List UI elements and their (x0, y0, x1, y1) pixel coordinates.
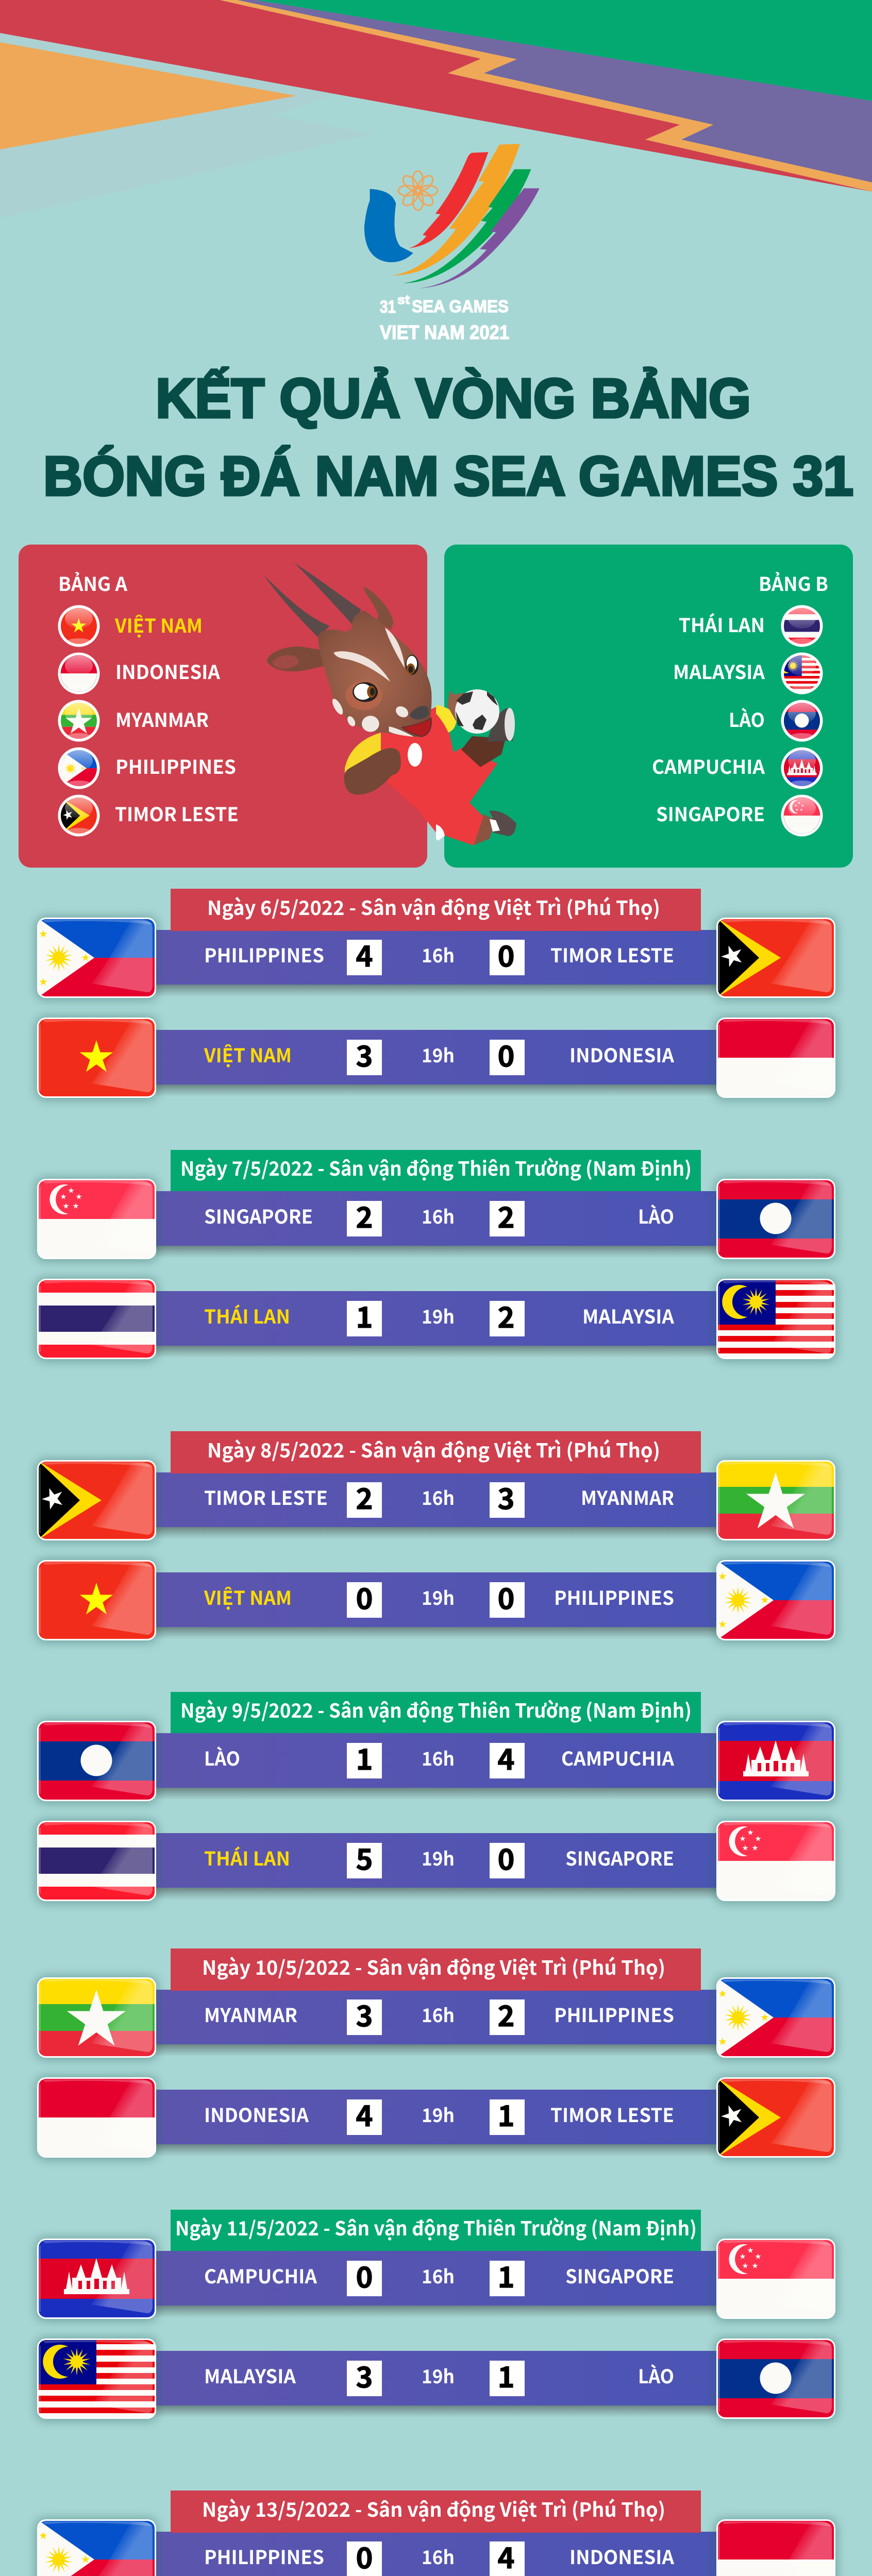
match: Thái Lan 5-0 Singapore (35, 1819, 837, 1904)
match day 5: 10/5/2022 (35, 1948, 837, 2160)
match: Việt Nam 0-0 Philippines: 0 (356, 1576, 373, 1618)
date header: Ngày 11/5/2022 - Sân vận động Thiên Trường (Nam Định) (175, 2213, 697, 2241)
match: Indonesia 4-1 Timor Leste: 4 (356, 2093, 373, 2135)
match day 7: 13/5/2022 (35, 2490, 837, 2576)
match: Campuchia 0-1 Singapore: SINGAPORE (565, 2261, 674, 2289)
date header (171, 2490, 701, 2533)
match: Philippines 0-4 Indonesia: 0 (356, 2535, 373, 2576)
match: Thái Lan 1-2 Malaysia: 1 (356, 1295, 373, 1336)
team: Singapore (656, 794, 837, 837)
match: Philippines 4-0 Timor Leste: 0 (497, 934, 515, 975)
team: Campuchia: CAMPUCHIA (652, 752, 765, 779)
date header (171, 1150, 701, 1191)
match: Malaysia 3-1 Lào: 3 (356, 2354, 373, 2396)
match: Campuchia 0-1 Singapore: 16h (422, 2261, 455, 2289)
match: Indonesia 4-1 Timor Leste: INDONESIA (204, 2100, 309, 2128)
team: Lào (729, 700, 829, 742)
match: Campuchia 0-1 Singapore: CAMPUCHIA (204, 2261, 317, 2289)
match: Lào 1-4 Campuchia: CAMPUCHIA (561, 1743, 674, 1771)
group B heading: BẢNG B (759, 569, 828, 597)
match: Thái Lan 5-0 Singapore: SINGAPORE (565, 1843, 674, 1871)
mascot: Sao La with football (264, 563, 516, 845)
team: Philippines (58, 747, 236, 789)
match: Thái Lan 1-2 Malaysia: 19h (422, 1301, 455, 1329)
match: Myanmar 3-2 Philippines: 3 (356, 1993, 373, 2035)
match: Myanmar 3-2 Philippines (35, 1976, 837, 2060)
match: Philippines 0-4 Indonesia (35, 2518, 837, 2576)
title: KẾT QUẢ VÒNG BẢNG (156, 367, 751, 429)
match: Timor Leste 2-3 Myanmar: TIMOR LESTE (204, 1483, 328, 1511)
match: Malaysia 3-1 Lào: LÀO (638, 2361, 674, 2389)
match day 6: 11/5/2022 (35, 2210, 837, 2421)
match: Campuchia 0-1 Singapore (35, 2237, 837, 2321)
logo text: st (397, 293, 410, 307)
mascot head (264, 563, 432, 737)
logo text (380, 293, 509, 344)
match: Việt Nam 3-0 Indonesia: 19h (422, 1040, 455, 1068)
match: Thái Lan 5-0 Singapore: 0 (497, 1837, 515, 1878)
icon: lotus flower (398, 171, 438, 210)
match: Lào 1-4 Campuchia: 16h (422, 1743, 455, 1771)
match: Singapore 2-2 Lào: 2 (497, 1195, 515, 1236)
match: Timor Leste 2-3 Myanmar (35, 1459, 837, 1543)
match day 4: 9/5/2022 (35, 1692, 837, 1904)
match: Malaysia 3-1 Lào (35, 2337, 837, 2421)
match: Indonesia 4-1 Timor Leste: TIMOR LESTE (550, 2100, 674, 2128)
team: Thái Lan: THÁI LAN (679, 610, 765, 638)
match: Malaysia 3-1 Lào: 1 (497, 2354, 515, 2396)
match: Philippines 0-4 Indonesia: 4 (497, 2535, 515, 2576)
logo: 31st SEA Games Vietnam 2021 (364, 144, 540, 344)
team: Timor Leste: TIMOR LESTE (115, 799, 239, 827)
match: Việt Nam 0-0 Philippines: 0 (497, 1576, 515, 1618)
team: Lào: LÀO (729, 705, 765, 733)
icon: football (455, 689, 499, 734)
match: Indonesia 4-1 Timor Leste (35, 2076, 837, 2160)
match: Thái Lan 5-0 Singapore: 5 (356, 1837, 373, 1878)
team: Singapore: SINGAPORE (656, 799, 765, 827)
match: Indonesia 4-1 Timor Leste: 1 (497, 2093, 515, 2135)
date header (171, 1692, 701, 1733)
match: Việt Nam 0-0 Philippines: PHILIPPINES (554, 1583, 674, 1611)
match: Singapore 2-2 Lào (35, 1177, 837, 1262)
match: Việt Nam 3-0 Indonesia (35, 1016, 837, 1100)
match: Malaysia 3-1 Lào: MALAYSIA (204, 2361, 296, 2389)
match: Timor Leste 2-3 Myanmar: 2 (356, 1476, 373, 1518)
mascot body (344, 690, 516, 845)
match: Campuchia 0-1 Singapore: 0 (356, 2255, 373, 2296)
match: Việt Nam 3-0 Indonesia: INDONESIA (569, 1040, 674, 1068)
logo text: SEA GAMES (412, 297, 509, 316)
match: Philippines 4-0 Timor Leste (35, 916, 837, 1001)
logo text: VIET NAM 2021 (380, 322, 509, 344)
match: Việt Nam 3-0 Indonesia: 0 (497, 1033, 515, 1075)
match: Philippines 4-0 Timor Leste: PHILIPPINES (204, 940, 324, 968)
date header: Ngày 6/5/2022 - Sân vận động Việt Trì (Phú Thọ) (207, 892, 660, 921)
match: Việt Nam 0-0 Philippines: VIỆT NAM (204, 1583, 292, 1611)
match day 3: 8/5/2022 (35, 1431, 837, 1643)
team: Việt Nam (52, 605, 203, 647)
match: Thái Lan 1-2 Malaysia: MALAYSIA (582, 1301, 674, 1329)
match: Việt Nam 0-0 Philippines (35, 1558, 837, 1643)
match: Myanmar 3-2 Philippines: 16h (422, 2000, 455, 2028)
match: Philippines 4-0 Timor Leste: TIMOR LESTE (550, 940, 674, 968)
match: Lào 1-4 Campuchia: 1 (356, 1737, 373, 1778)
team: Timor Leste (58, 794, 239, 837)
logo text: 31 (380, 297, 396, 317)
match: Việt Nam 0-0 Philippines: 19h (422, 1583, 455, 1611)
match day 1: 6/5/2022 (35, 889, 837, 1100)
date header (171, 1948, 701, 1991)
team: Campuchia (652, 747, 829, 789)
match: Myanmar 3-2 Philippines: PHILIPPINES (554, 2000, 674, 2028)
panel: group B (444, 545, 853, 868)
date header (171, 2210, 701, 2251)
match: Singapore 2-2 Lào: LÀO (638, 1201, 674, 1229)
match: Thái Lan 1-2 Malaysia: 2 (497, 1295, 515, 1336)
group A heading: BẢNG A (58, 569, 127, 597)
match: Singapore 2-2 Lào: 16h (422, 1201, 455, 1229)
match: Malaysia 3-1 Lào: 19h (422, 2361, 455, 2389)
date header (171, 1431, 701, 1473)
match: Việt Nam 3-0 Indonesia: VIỆT NAM (204, 1040, 292, 1068)
team: Malaysia (673, 652, 829, 694)
date header: Ngày 7/5/2022 - Sân vận động Thiên Trường (Nam Định) (180, 1153, 692, 1181)
date header: Ngày 10/5/2022 - Sân vận động Việt Trì (Phú Thọ) (202, 1952, 665, 1980)
panel: group A (19, 545, 427, 868)
match: Việt Nam 3-0 Indonesia: 3 (356, 1033, 373, 1075)
date header: Ngày 8/5/2022 - Sân vận động Việt Trì (Phú Thọ) (207, 1435, 660, 1463)
match: Myanmar 3-2 Philippines: MYANMAR (204, 2000, 297, 2028)
match: Philippines 4-0 Timor Leste: 4 (356, 934, 373, 975)
match: Philippines 0-4 Indonesia: 16h (422, 2542, 455, 2570)
match: Campuchia 0-1 Singapore: 1 (497, 2255, 515, 2296)
team: Myanmar (52, 700, 209, 742)
date header: Ngày 13/5/2022 - Sân vận động Việt Trì (Phú Thọ) (202, 2494, 665, 2522)
match: Philippines 4-0 Timor Leste: 16h (422, 940, 455, 968)
match: Thái Lan 1-2 Malaysia (35, 1277, 837, 1362)
date header (171, 889, 701, 931)
title: BÓNG ĐÁ NAM SEA GAMES 31 (43, 445, 853, 507)
match: Thái Lan 5-0 Singapore: THÁI LAN (204, 1843, 290, 1871)
top decoration (0, 0, 872, 218)
match: Indonesia 4-1 Timor Leste: 19h (422, 2100, 455, 2128)
team: Myanmar: MYANMAR (115, 705, 209, 733)
team: Philippines: PHILIPPINES (115, 752, 236, 779)
match: Lào 1-4 Campuchia: LÀO (204, 1743, 240, 1771)
date header: Ngày 9/5/2022 - Sân vận động Thiên Trường (Nam Định) (180, 1695, 692, 1723)
match: Singapore 2-2 Lào: 2 (356, 1195, 373, 1236)
match: Thái Lan 1-2 Malaysia: THÁI LAN (204, 1301, 290, 1329)
icon: logo ribbons (364, 144, 540, 289)
match: Lào 1-4 Campuchia: 4 (497, 1737, 515, 1778)
match: Singapore 2-2 Lào: SINGAPORE (204, 1201, 313, 1229)
match: Thái Lan 5-0 Singapore: 19h (422, 1843, 455, 1871)
match: Timor Leste 2-3 Myanmar: MYANMAR (581, 1483, 674, 1511)
match: Lào 1-4 Campuchia (35, 1719, 837, 1804)
team: Thái Lan (679, 605, 829, 647)
title (43, 367, 853, 507)
team: Việt Nam: VIỆT NAM (114, 611, 203, 638)
match: Timor Leste 2-3 Myanmar: 16h (422, 1483, 455, 1511)
match: Timor Leste 2-3 Myanmar: 3 (497, 1476, 515, 1518)
team: Indonesia: INDONESIA (115, 657, 220, 685)
match: Philippines 0-4 Indonesia: INDONESIA (569, 2542, 674, 2570)
team: Indonesia (52, 652, 220, 694)
match day 2: 7/5/2022 (35, 1150, 837, 1362)
match: Myanmar 3-2 Philippines: 2 (497, 1993, 515, 2035)
match: Philippines 0-4 Indonesia: PHILIPPINES (204, 2542, 324, 2570)
team: Malaysia: MALAYSIA (673, 657, 765, 685)
